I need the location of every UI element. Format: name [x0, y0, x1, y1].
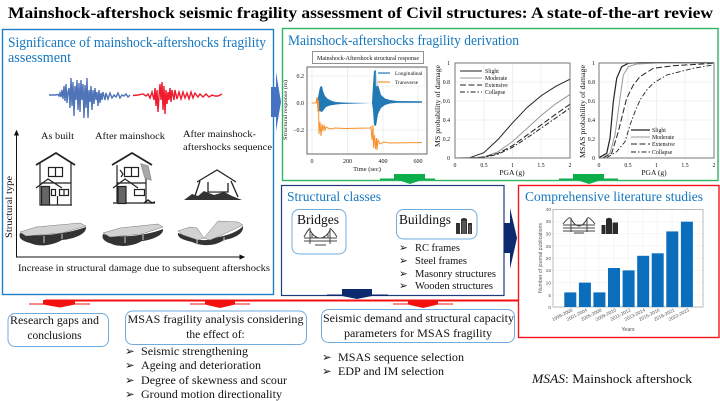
chart: number of journal publications: 2018-2021 — [653, 307, 676, 322]
chart: structural response time history: Structural response (m) — [282, 80, 289, 140]
chart: number of journal publications: Years — [621, 327, 635, 333]
chart: number of journal publications: 10 — [546, 280, 551, 286]
list: sequence and measure selection — [322, 352, 464, 378]
chart: number of journal publications: Number of journal publications — [538, 223, 544, 293]
chart: MSAS fragility curves: 1 — [655, 163, 658, 169]
chart: MSAS fragility curves: 0.4 — [588, 118, 595, 124]
list: fragility analysis effects: ➢ — [125, 360, 135, 372]
heading: literature: Comprehensive literature studies — [525, 190, 703, 205]
chart: number of journal publications: 2009-2010 — [595, 307, 617, 322]
chart: structural response time history: 0.2 — [296, 74, 304, 80]
chart: MS fragility curves: Moderate — [485, 76, 508, 82]
chart: MSAS fragility curves — [578, 61, 716, 177]
chart: structural response time history: 0.0 — [296, 101, 304, 107]
chart: MSAS fragility curves: 0.6 — [588, 99, 595, 105]
list: building types: ➢ — [399, 281, 408, 292]
chart: number of journal publications: 30 — [546, 232, 551, 238]
chart: number of journal publications: 5 — [548, 293, 551, 299]
heading: structural classes: Structural classes — [287, 190, 381, 205]
chart: number of journal publications: 2001-2004 — [566, 307, 588, 322]
list: fragility analysis effects: Ageing and deterioration — [141, 360, 261, 372]
card: MSAS fragility analysis: MSAS fragility analysis considering — [128, 314, 304, 326]
chart: structural response time history: Mainshock-Aftershock structural response — [317, 55, 419, 62]
chart: structural response time history: 400 — [378, 159, 388, 165]
chart: MS fragility curves: Slight — [485, 69, 499, 75]
icon: intact house — [36, 153, 75, 205]
arrow: navy to literature studies — [504, 208, 517, 269]
chart: MSAS fragility curves: 2 — [713, 163, 716, 169]
chart: MSAS fragility curves: 0.5 — [624, 163, 632, 169]
chart: number of journal publications: 2022-2023 — [668, 307, 690, 322]
list: fragility analysis effects: ➢ — [125, 346, 135, 358]
list: sequence and measure selection: MSAS sequence selection — [338, 352, 464, 364]
chart: aftershock waveform — [133, 82, 222, 114]
chart: number of journal publications: 35 — [546, 219, 551, 225]
card: MSAS fragility analysis — [126, 311, 306, 344]
title: Mainshock-aftershock seismic fragility assessment of Civil structures: A state-of-the-art review — [8, 5, 714, 22]
icon: damaged bridge — [102, 224, 163, 246]
card: research gaps and conclusions — [8, 314, 108, 346]
chart: number of journal publications: 2011-2012 — [610, 307, 632, 322]
list: fragility analysis effects: Degree of skewness and scour — [141, 375, 287, 387]
arrow: structural type axis — [15, 131, 18, 257]
list: sequence and measure selection: EDP and IM selection — [338, 366, 444, 378]
list: fragility analysis effects: Seismic strengthening — [141, 346, 248, 358]
icon: building — [602, 218, 618, 234]
chart: structural response time history: 200 — [343, 159, 352, 165]
list: sequence and measure selection: ➢ — [322, 366, 332, 378]
chart: structural response time history: Time (sec) — [353, 166, 381, 173]
chart: structural response time history: Transverse — [395, 80, 419, 86]
card: seismic demand and structural capacity — [322, 310, 514, 342]
list: sequence and measure selection: ➢ — [322, 352, 332, 364]
chart: MS fragility curves: 1 — [447, 61, 450, 67]
icon: bridge — [563, 218, 595, 233]
list: building types: RC frames — [415, 243, 460, 254]
label: structural type: Structural type — [5, 176, 15, 238]
arrow: red to research gaps — [29, 300, 90, 308]
label: after mainshock-aftershocks sequence: After mainshock- — [183, 129, 256, 140]
chart: structural response time history: 0 — [310, 159, 314, 165]
list: fragility analysis effects: ➢ — [125, 389, 135, 401]
chart: structural response time history: −0.2 — [293, 128, 304, 134]
arrow: structural damage axis — [16, 255, 244, 259]
chart: structural response time history — [282, 52, 427, 173]
chart: MSAS fragility curves: 0 — [592, 156, 595, 162]
note: MSAS abbreviation: MSAS: Mainshock aftershock — [531, 372, 693, 386]
card: buildings: Buildings — [399, 212, 451, 227]
card: bridges — [292, 210, 346, 254]
icon: damaged house after mainshock — [112, 153, 155, 204]
chart: MS fragility curves: 0.5 — [480, 163, 488, 169]
chart: number of journal publications: 2013-2014 — [624, 307, 646, 322]
card: seismic demand and structural capacity: parameters for MSAS fragility — [344, 328, 492, 340]
chart: MS fragility curves: 1.5 — [537, 163, 545, 169]
chart: MSAS fragility curves: MSAS probability of damage — [578, 65, 587, 158]
chart: MSAS fragility curves: Moderate — [652, 135, 675, 141]
arrow: green to structural classes — [380, 174, 435, 184]
heading: significance: Significance of mainshock-aftershocks fragility — [8, 35, 267, 51]
chart: MS fragility curves: 0 — [454, 163, 457, 169]
chart: MSAS fragility curves: 1.5 — [681, 163, 689, 169]
list: building types: Steel frames — [415, 256, 467, 267]
card: research gaps and conclusions: Research gaps and — [10, 315, 99, 327]
chart: MS fragility curves: 0.8 — [443, 80, 450, 86]
chart: number of journal publications: 2005-2008 — [580, 307, 603, 322]
label: after mainshock-aftershocks sequence: aftershocks sequence — [183, 142, 272, 153]
arrow: red to seismic demand — [393, 300, 453, 308]
list: building types: ➢ — [399, 269, 408, 280]
chart: MSAS fragility curves: Extensive — [652, 142, 675, 148]
panel: significance of mainshock-aftershocks fragility assessment — [2, 30, 274, 294]
chart: MSAS fragility curves: 1 — [592, 61, 595, 67]
panel: structural classes — [282, 186, 504, 296]
chart: structural response time history: 600 — [414, 159, 422, 165]
icon: collapsed house — [184, 170, 242, 200]
chart: number of journal publications: 40 — [546, 207, 551, 213]
arrow: red to fragility analysis — [190, 300, 250, 308]
chart: MS fragility curves: 2 — [569, 163, 572, 169]
arrow: navy to MSAS section — [327, 289, 388, 299]
heading: significance: assessment — [8, 50, 71, 66]
chart: MS fragility curves: 1 — [511, 163, 514, 169]
heading: derivation: Mainshock-aftershocks fragility derivation — [288, 33, 520, 49]
chart: MSAS fragility curves: PGA (g) — [641, 168, 667, 177]
chart: number of journal publications: 1999-2000 — [551, 307, 574, 322]
chart: number of journal publications: 0 — [548, 305, 551, 311]
arrow: green to literature studies — [559, 174, 618, 184]
chart: MS fragility curves: 0 — [447, 156, 450, 162]
chart: MS fragility curves: 0.2 — [443, 137, 450, 143]
list: fragility analysis effects: Ground motion directionality — [141, 389, 282, 401]
card: MSAS fragility analysis: the effect of: — [186, 329, 245, 341]
chart: MS fragility curves: Collapse — [485, 90, 506, 96]
card: buildings — [396, 210, 477, 239]
chart: number of journal publications — [538, 207, 703, 333]
list: fragility analysis effects: ➢ — [125, 375, 135, 387]
list: building types: Wooden structures — [415, 281, 493, 292]
chart: MSAS fragility curves: 0.2 — [588, 137, 595, 143]
list: building types: Masonry structures — [415, 269, 496, 280]
chart: mainshock waveform — [49, 78, 130, 118]
card: research gaps and conclusions: conclusions — [27, 330, 82, 342]
chart: MS fragility curves: PGA (g) — [499, 168, 525, 177]
icon: collapsed bridge — [178, 221, 243, 245]
chart: number of journal publications: 20 — [546, 256, 551, 262]
chart: MS fragility curves — [433, 61, 572, 177]
list: building types: ➢ — [399, 243, 408, 254]
chart: number of journal publications: 15 — [546, 268, 551, 274]
chart: MS fragility curves: MS probability of damage — [433, 65, 442, 147]
label: as built: As built — [41, 132, 74, 142]
chart: number of journal publications: 25 — [546, 244, 551, 250]
chart: MSAS fragility curves: Slight — [652, 128, 666, 134]
chart: MS fragility curves: Extensive — [485, 83, 508, 89]
panel: comprehensive literature studies — [518, 186, 719, 338]
label: after mainshock: After mainshock — [95, 131, 165, 142]
arrow: blue to derivation panel — [271, 72, 281, 131]
chart: MSAS fragility curves: 0.8 — [588, 80, 595, 86]
chart: MS fragility curves: 0.4 — [443, 118, 450, 124]
chart: number of journal publications: 2015-2016 — [638, 307, 661, 322]
chart: MSAS fragility curves: 0 — [598, 163, 601, 169]
card: bridges: Bridges — [297, 212, 339, 227]
panel: mainshock-aftershocks fragility derivation — [282, 28, 718, 180]
chart: MS fragility curves: 0.6 — [443, 99, 450, 105]
card: seismic demand and structural capacity: Seismic demand and structural capacity — [323, 313, 514, 325]
icon: intact bridge — [19, 223, 86, 245]
list: building types: ➢ — [399, 256, 408, 267]
chart: MSAS fragility curves: Collapse — [652, 150, 673, 156]
chart: structural response time history: Longitudinal — [395, 71, 423, 77]
label: increase in structural damage: Increase in structural damage due to subsequent aftershocks — [18, 263, 270, 274]
list: building types — [399, 243, 496, 292]
connector: red line — [45, 300, 519, 302]
list: fragility analysis effects — [125, 346, 287, 401]
